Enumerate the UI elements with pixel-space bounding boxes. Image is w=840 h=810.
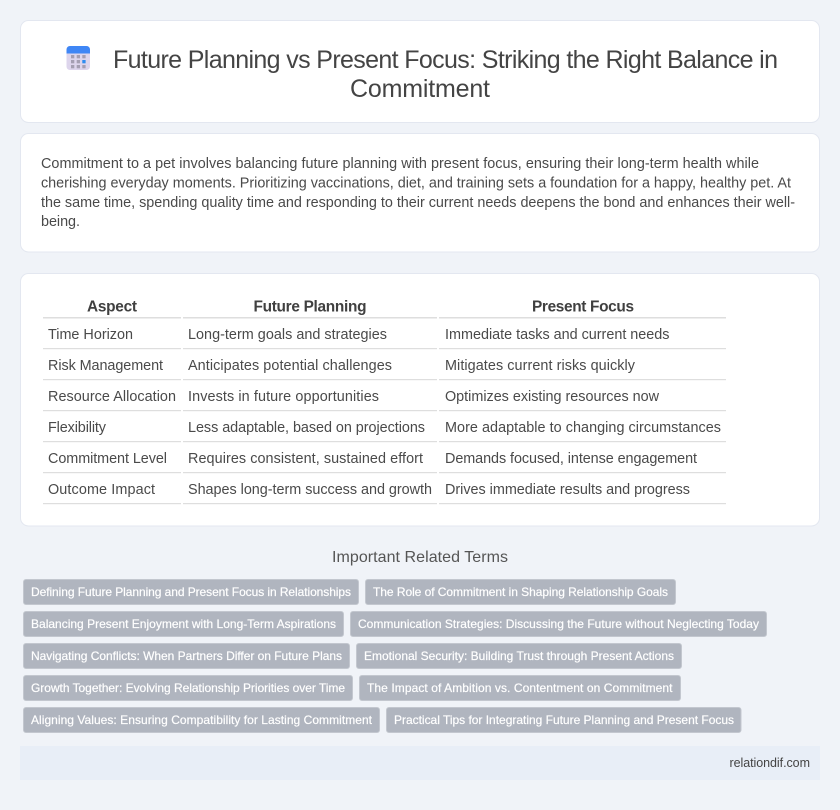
tag: practical tips: Practical Tips for Integrating Future Planning and Present Focus [394, 713, 734, 727]
tag: communication strategies [350, 612, 766, 636]
row: resource allocation: Resource Allocation [48, 389, 176, 405]
tag: communication strategies: Communication Strategies: Discussing the Future without Neglecting Today [358, 617, 759, 631]
table header row: Aspect [87, 298, 137, 316]
intro paragraph: Commitment to a pet involves balancing future planning with present focus, ensuring their long-term health while [41, 156, 759, 172]
tag: growth together: Growth Together: Evolving Relationship Priorities over Time [31, 681, 345, 695]
tag: practical tips [386, 708, 741, 732]
tag: role of commitment [366, 580, 676, 604]
row: flexibility: More adaptable to changing circumstances [445, 420, 721, 436]
intro paragraph: cherishing everyday moments. Prioritizing vaccinations, diet, and training sets a foundation for a happy, healthy pet. At [41, 176, 791, 192]
heading: important related terms: Important Related Terms [332, 549, 508, 566]
row: resource allocation: Optimizes existing resources now [445, 389, 660, 405]
tag: defining future planning: Defining Future Planning and Present Focus in Relationships [31, 585, 351, 599]
panel: introduction [20, 134, 820, 252]
row: resource allocation: Invests in future opportunities [188, 389, 379, 405]
row: commitment level: Requires consistent, sustained effort [188, 451, 423, 467]
intro paragraph [41, 156, 795, 230]
row: resource allocation [48, 389, 660, 405]
table header row [87, 298, 634, 316]
row: flexibility [48, 420, 721, 436]
icon: calendar [66, 46, 90, 70]
tag: role of commitment: The Role of Commitment in Shaping Relationship Goals [373, 585, 668, 599]
tag: growth together [24, 676, 352, 700]
title: Commitment [350, 75, 490, 103]
row: outcome impact: Drives immediate results and progress [445, 482, 690, 498]
row: time horizon: Immediate tasks and current needs [445, 327, 670, 343]
row: outcome impact [48, 482, 690, 498]
tag: ambition vs contentment [360, 676, 680, 700]
row: commitment level [48, 451, 697, 467]
tag: emotional security [356, 644, 682, 668]
tag: navigating conflicts: Navigating Conflicts: When Partners Differ on Future Plans [31, 649, 342, 663]
panel: title header [20, 20, 820, 122]
panel: related term tags [24, 580, 766, 732]
footer source text: relationdif.com [730, 756, 810, 770]
row: time horizon: Long-term goals and strategies [188, 327, 387, 343]
row: outcome impact: Shapes long-term success and growth [188, 482, 432, 498]
tag: emotional security: Emotional Security: Building Trust through Present Actions [364, 649, 674, 663]
row: flexibility: Less adaptable, based on projections [188, 420, 425, 436]
intro paragraph: the same time, spending quality time and responding to their current needs deepens the bond and enhances their well- [41, 195, 795, 211]
title: Future Planning vs Present Focus: Striking the Right Balance in [113, 46, 778, 74]
title [113, 46, 778, 103]
row: risk management: Mitigates current risks quickly [445, 358, 636, 374]
row: time horizon [48, 327, 670, 343]
footer bar [20, 746, 820, 780]
tag: aligning values: Aligning Values: Ensuring Compatibility for Lasting Commitment [31, 713, 373, 727]
intro paragraph: being. [41, 214, 80, 230]
panel: comparison table [20, 274, 820, 526]
tag: balancing present enjoyment: Balancing Present Enjoyment with Long-Term Aspirations [31, 617, 336, 631]
row: outcome impact: Outcome Impact [48, 482, 155, 498]
row: time horizon: Time Horizon [48, 327, 133, 343]
row: risk management: Anticipates potential challenges [188, 358, 392, 374]
row: commitment level: Commitment Level [48, 451, 167, 467]
tag: aligning values [24, 708, 380, 732]
tag: ambition vs contentment: The Impact of Ambition vs. Contentment on Commitment [367, 681, 673, 695]
row: commitment level: Demands focused, intense engagement [445, 451, 697, 467]
row: flexibility: Flexibility [48, 420, 107, 436]
table header row: Present Focus [532, 298, 634, 316]
tag: navigating conflicts [24, 644, 350, 668]
row: risk management [48, 358, 636, 374]
tag: balancing present enjoyment [24, 612, 344, 636]
table header row: Future Planning [254, 298, 366, 316]
row: risk management: Risk Management [48, 358, 163, 374]
tag: defining future planning [24, 580, 358, 604]
